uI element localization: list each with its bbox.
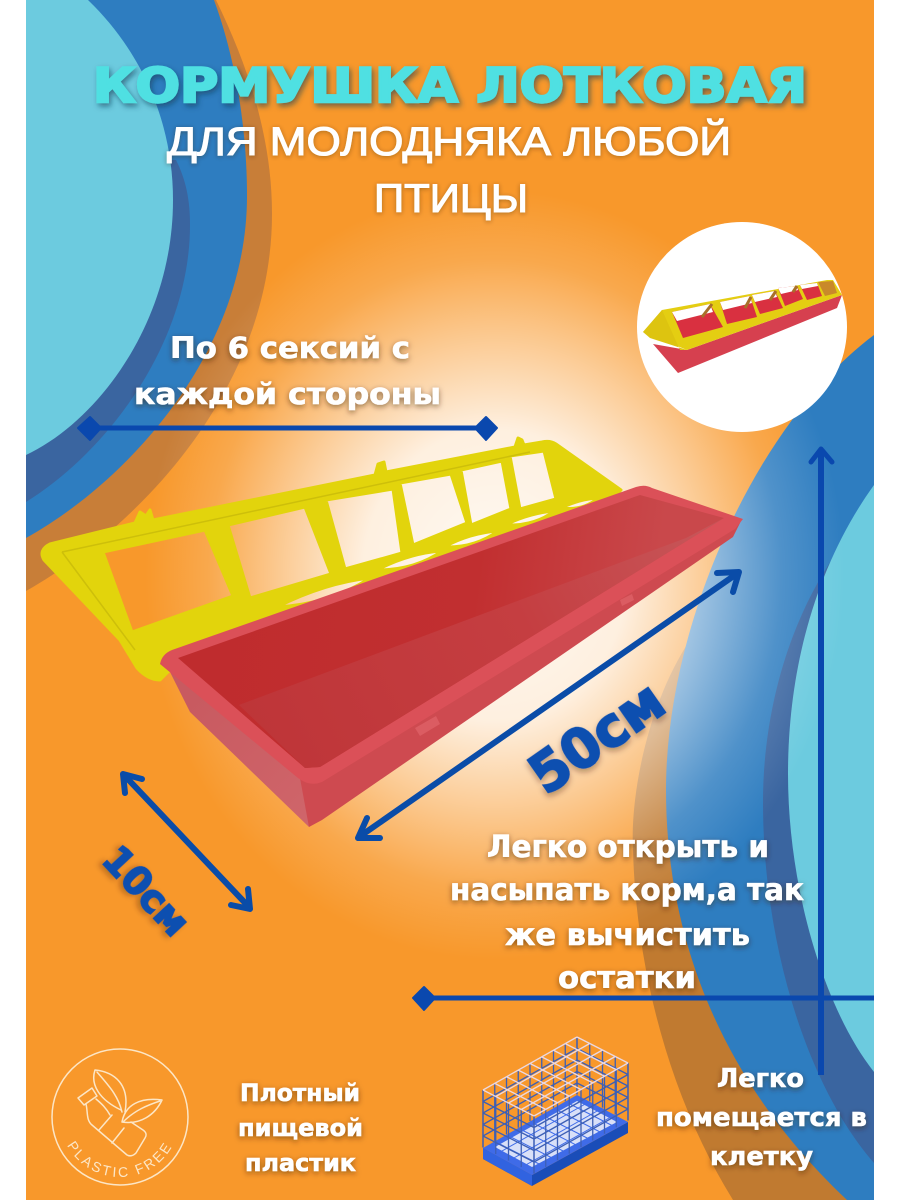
text: fits in a cage: клетку: [710, 1142, 813, 1172]
icon: plastic free badge: [51, 1048, 189, 1186]
callout: easy to open: же вычистить: [505, 918, 750, 953]
feeder: yellow lid: [42, 438, 621, 680]
arrow: 50 cm: [358, 572, 739, 838]
connector line with diamonds: [78, 417, 497, 440]
connector line with diamond: [413, 987, 874, 1010]
text: dense food plastic: пищевой: [238, 1114, 363, 1142]
text: dense food plastic: [238, 1079, 363, 1177]
icon: plastic free badge: PLASTIC FREE: [67, 1140, 172, 1177]
text: dense food plastic: Плотный: [240, 1079, 360, 1107]
label: 50 cm: 50см: [517, 669, 676, 806]
title: КОРМУШКА ЛОТКОВАЯ: [93, 59, 807, 114]
subtitle: ДЛЯ МОЛОДНЯКА ЛЮБОЙ: [167, 118, 731, 164]
background: top-left curved bands: [26, 0, 272, 591]
arrow: 10 cm: [123, 774, 250, 909]
background: central glow: [26, 180, 874, 980]
icon: wire cage: [483, 1037, 628, 1186]
text: fits in a cage: помещается в: [656, 1103, 867, 1133]
background: right curved bands: [633, 335, 874, 1200]
inset circle with feeder photo: [637, 222, 847, 432]
callout: easy to open: Легко открыть и: [487, 830, 769, 865]
text: fits in a cage: Легко: [717, 1064, 804, 1094]
callout: sections: каждой стороны: [134, 377, 441, 411]
text: fits in a cage: [656, 1064, 867, 1172]
text: dense food plastic: пластик: [245, 1149, 356, 1177]
callout: sections: [134, 331, 441, 411]
subtitle: ПТИЦЫ: [374, 177, 528, 221]
callout: easy to open: насыпать корм,а так: [450, 873, 804, 908]
feeder: red tray: [160, 486, 743, 827]
label: 10 cm: 10см: [94, 837, 198, 945]
callout: sections: По 6 сексий с: [170, 331, 410, 365]
vertical arrow: [811, 449, 832, 1075]
subtitle: [167, 118, 731, 221]
callout: easy to open: [450, 830, 804, 996]
callout: easy to open: остатки: [558, 961, 696, 996]
